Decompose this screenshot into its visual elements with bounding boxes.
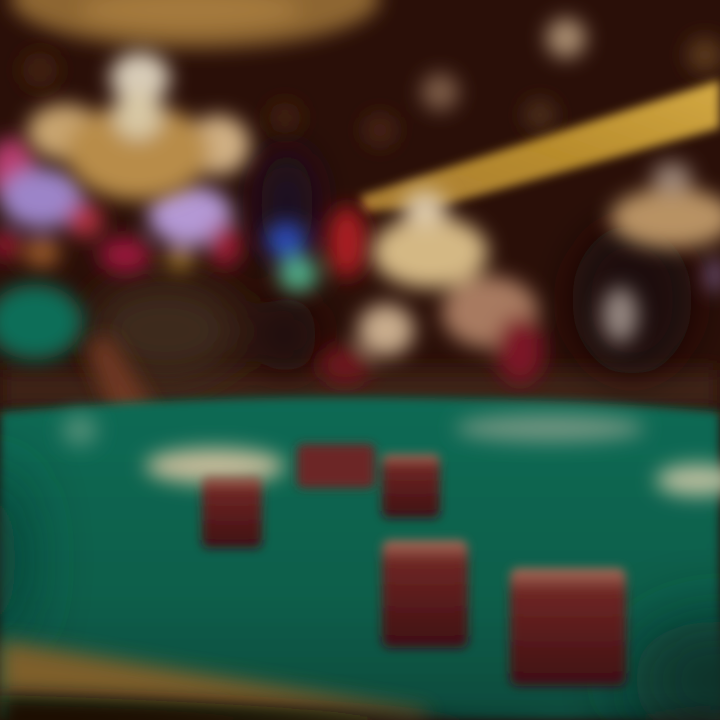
left figure: white and gold statue [27,52,250,200]
table gold rim [0,640,430,720]
right figures [602,162,720,343]
teal chip stack [0,284,83,360]
centre figure [319,190,544,385]
dice [202,444,626,686]
centre coloured lights [266,206,367,292]
background wall [0,0,720,420]
lower wall band [0,370,720,410]
felt shading [0,470,720,720]
brown pole [85,335,160,440]
gold beam [360,80,720,212]
chandelier top [10,0,380,48]
table felt [0,397,720,720]
left figure: colourful lights [0,138,241,273]
table dark bottom edge [0,695,720,720]
table markings [62,414,720,496]
dark crowd shapes [90,150,692,380]
bokeh lights [22,18,720,146]
